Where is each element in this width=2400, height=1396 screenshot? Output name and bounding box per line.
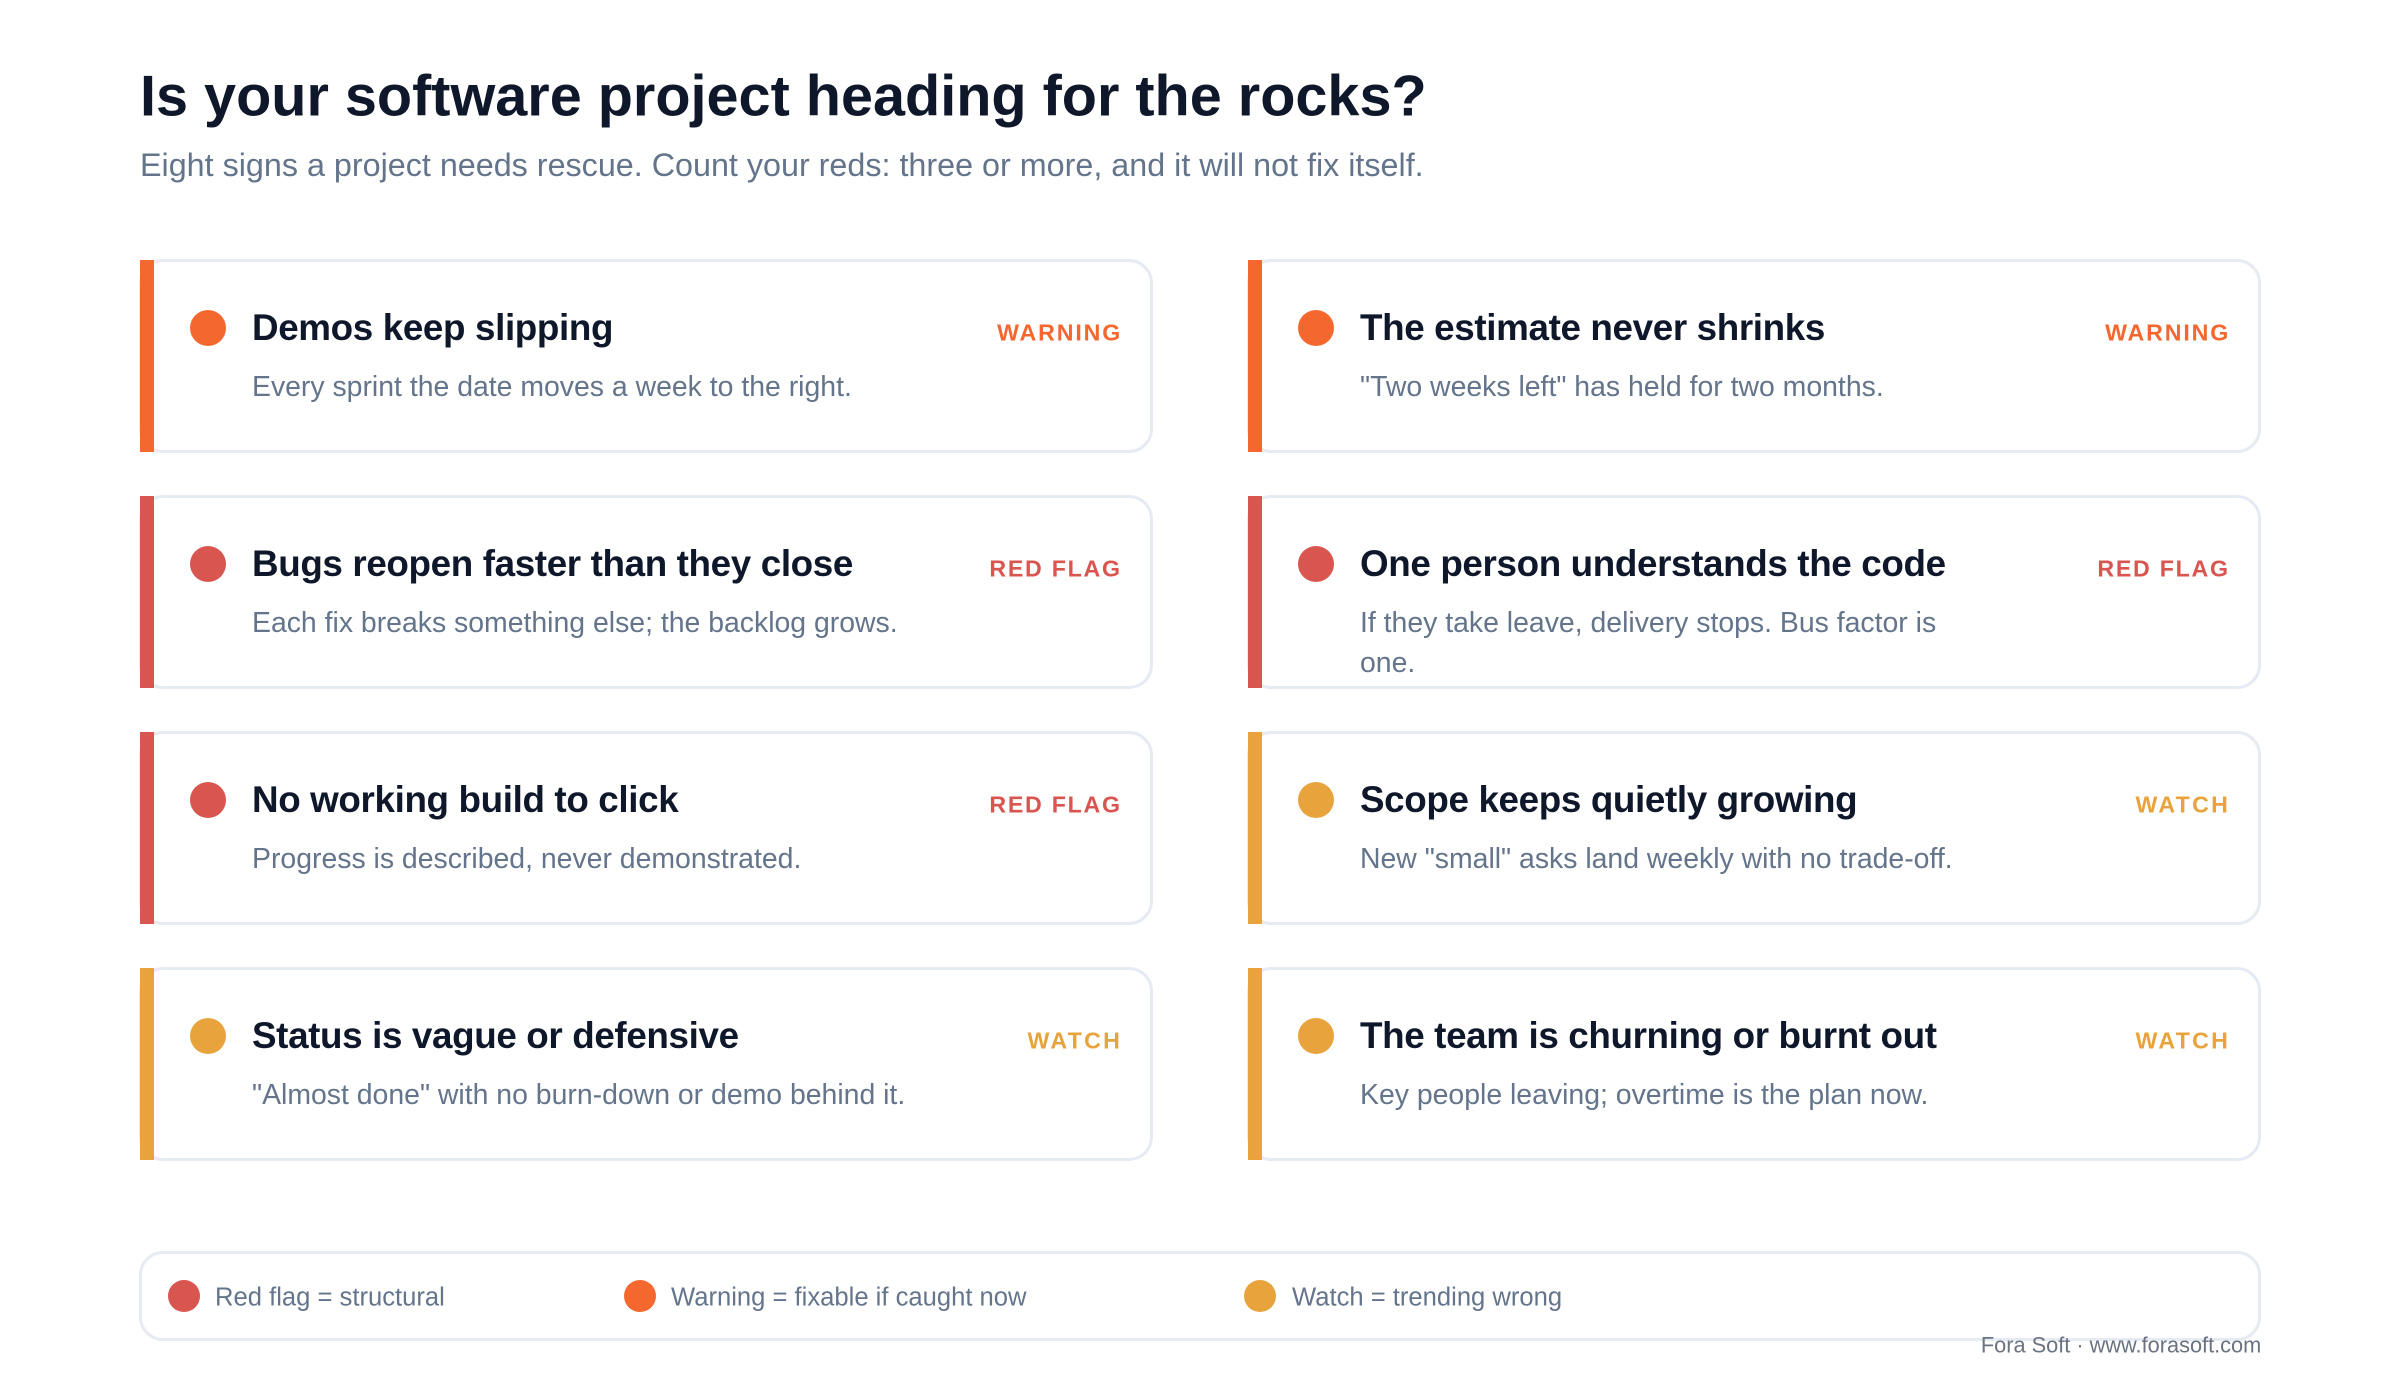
panel: scope keeps quietly growing: WATCH: [2135, 793, 2230, 818]
panel: bugs reopen faster than they close: RED FLAG: [990, 557, 1122, 582]
panel: demos keep slipping: Demos keep slipping: [252, 306, 613, 347]
panel: demos keep slipping: WARNING: [997, 321, 1122, 346]
panel: status is vague or defensive: "Almost done" with no burn-down or demo behind it.: [252, 1078, 905, 1110]
legend: watch label: Watch = trending wrong: [1292, 1284, 1562, 1312]
panel: no working build to click: No working build to click: [252, 778, 678, 819]
panel: scope keeps quietly growing: New "small" asks land weekly with no trade-off.: [1360, 842, 1952, 874]
panel: scope keeps quietly growing: [1248, 732, 2260, 924]
legend: red flag label: Red flag = structural: [215, 1284, 445, 1312]
footer credit: Fora Soft · www.forasoft.com: [1981, 1333, 2261, 1357]
panel: status is vague or defensive: Status is vague or defensive: [252, 1014, 738, 1055]
legend: red flag dot: [168, 1280, 200, 1312]
panel: bugs reopen faster than they close: Each fix breaks something else; the backlog grows.: [252, 606, 897, 638]
legend: watch dot: [1244, 1280, 1276, 1312]
panel: the team is churning or burnt out: WATCH: [2135, 1029, 2230, 1054]
panel: the estimate never shrinks: The estimate never shrinks: [1360, 306, 1824, 347]
panel: one person understands the code: One person understands the code: [1360, 542, 1945, 583]
panel: one person understands the code: one.: [1360, 646, 1415, 678]
panel: the estimate never shrinks: WARNING: [2105, 321, 2230, 346]
panel: one person understands the code: [1248, 496, 2260, 688]
title: Is your software project heading for the rocks?: [140, 63, 1427, 128]
panel: status is vague or defensive: WATCH: [1027, 1029, 1122, 1054]
panel: bugs reopen faster than they close: [140, 496, 1152, 688]
panel: no working build to click: [140, 732, 1152, 924]
panel: no working build to click: Progress is described, never demonstrated.: [252, 842, 801, 874]
legend: warning dot: [624, 1280, 656, 1312]
subtitle: Eight signs a project needs rescue. Count your reds: three or more, and it will not fix itself.: [140, 148, 1424, 184]
panel: status is vague or defensive: [140, 968, 1152, 1160]
panel: bugs reopen faster than they close: Bugs reopen faster than they close: [252, 542, 852, 583]
panel: the estimate never shrinks: [1248, 260, 2260, 452]
legend panel: [139, 1251, 2261, 1341]
panel: one person understands the code: If they take leave, delivery stops. Bus factor is: [1360, 606, 1936, 638]
legend: warning label: Warning = fixable if caught now: [671, 1284, 1027, 1312]
panel: the team is churning or burnt out: Key people leaving; overtime is the plan now.: [1360, 1078, 1928, 1110]
panel: the team is churning or burnt out: The team is churning or burnt out: [1360, 1014, 1936, 1055]
panel: demos keep slipping: Every sprint the date moves a week to the right.: [252, 370, 851, 402]
panel: scope keeps quietly growing: Scope keeps quietly growing: [1360, 778, 1857, 819]
panel: the team is churning or burnt out: [1248, 968, 2260, 1160]
panel: one person understands the code: RED FLAG: [2098, 557, 2230, 582]
panel: demos keep slipping: [140, 260, 1152, 452]
panel: the estimate never shrinks: "Two weeks left" has held for two months.: [1360, 370, 1883, 402]
panel: no working build to click: RED FLAG: [990, 793, 1122, 818]
